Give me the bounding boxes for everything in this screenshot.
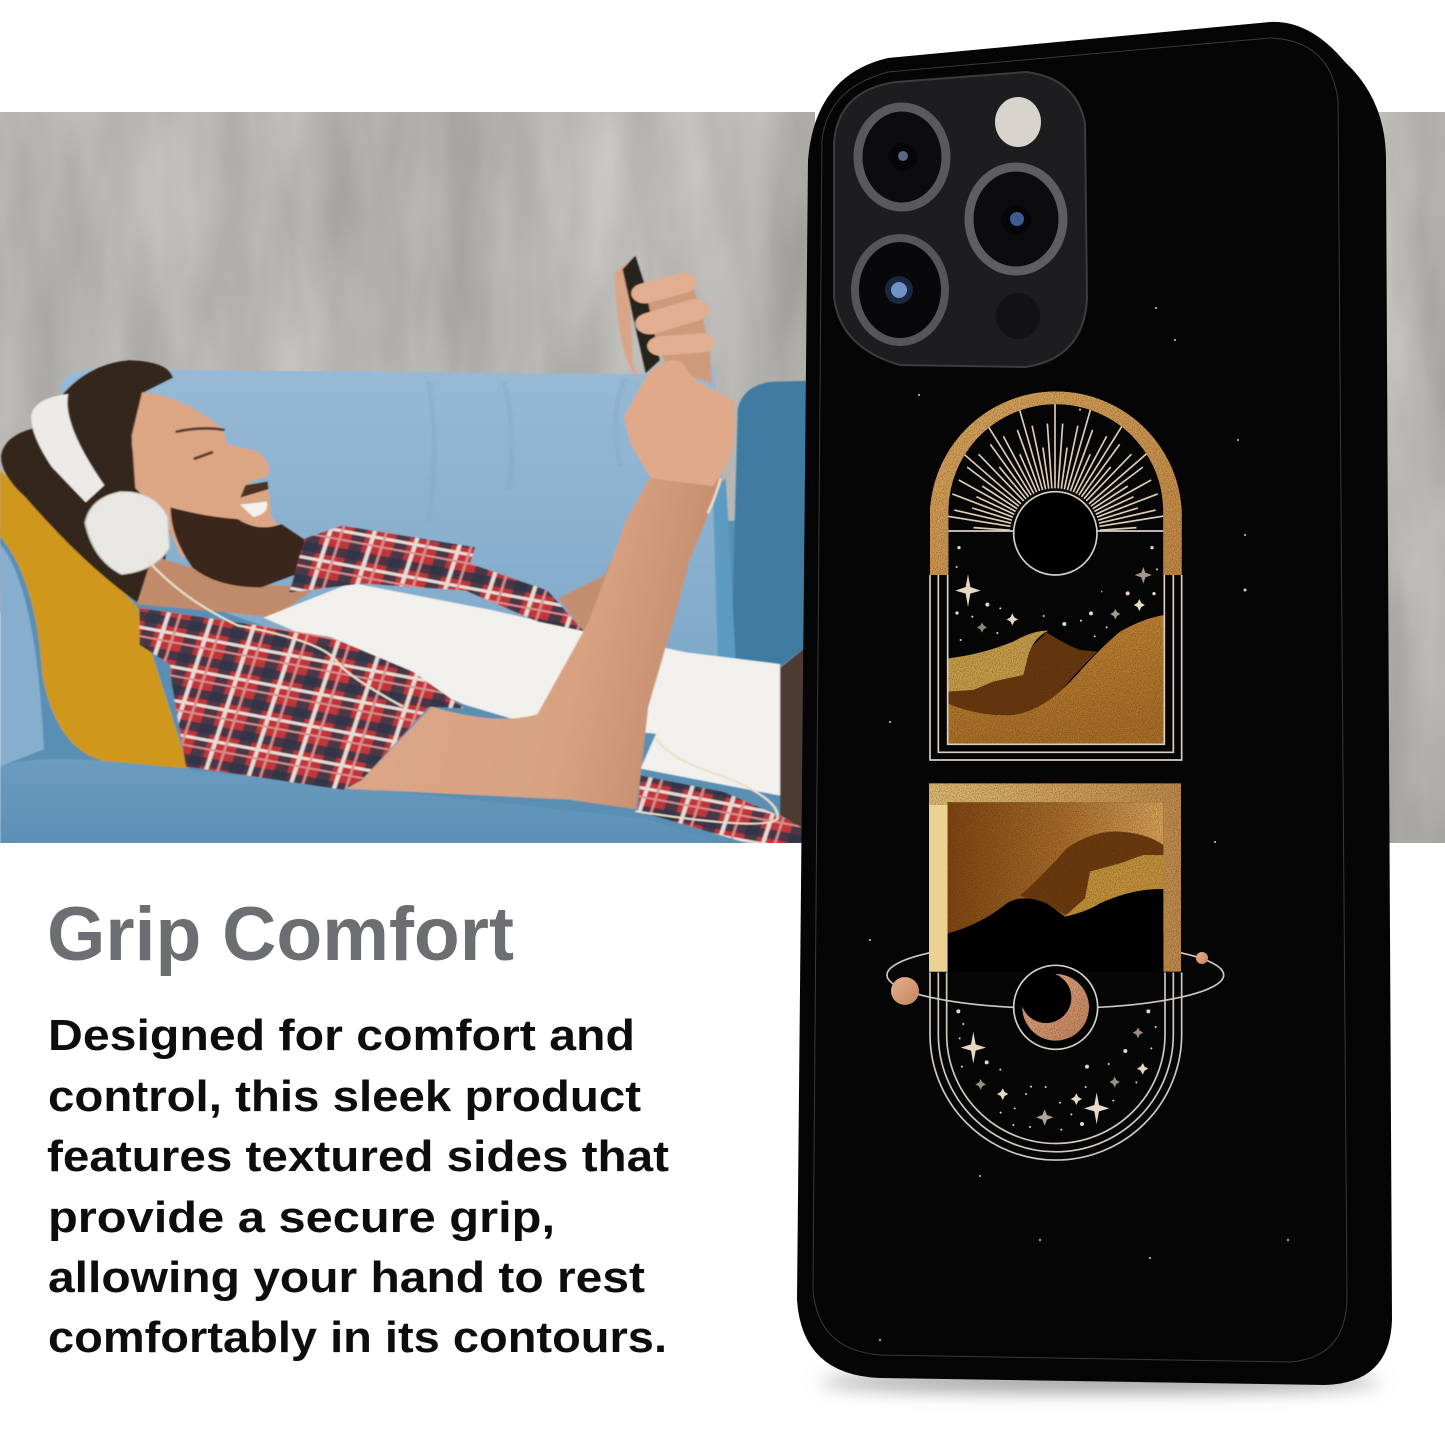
body text: provide a secure grip,	[48, 1193, 555, 1242]
palm behind phone	[615, 262, 641, 380]
sun and frame lines	[930, 492, 1182, 760]
camera module	[834, 72, 1087, 367]
star specks	[869, 307, 1289, 1341]
brow and eye	[176, 428, 225, 459]
hair	[1, 360, 173, 602]
orbit ring	[886, 952, 1224, 1008]
fist	[624, 360, 735, 486]
gold arch base	[930, 391, 1182, 575]
fingers over phone	[645, 283, 702, 346]
gold arch texture	[930, 391, 1182, 575]
forearm	[346, 476, 723, 809]
sun rays	[948, 404, 1164, 530]
moon window artwork	[887, 783, 1224, 1160]
sofa seat	[0, 759, 482, 802]
jeans	[779, 648, 804, 828]
earphone cable	[147, 478, 778, 824]
sun window artwork	[915, 391, 1195, 760]
dune shadow	[948, 632, 1097, 715]
gold sky	[948, 802, 1163, 936]
sensor	[996, 293, 1040, 339]
stars	[955, 409, 1158, 641]
heading: Grip Comfort	[47, 892, 514, 977]
smile	[240, 502, 267, 517]
camera bump	[834, 72, 1087, 367]
lens right	[969, 167, 1063, 271]
shirt collar plaid	[289, 526, 584, 631]
back of hand behind fingers	[641, 272, 712, 384]
case inner edge	[813, 38, 1347, 1362]
body text: comfortably in its contours.	[48, 1313, 667, 1362]
phone in hand	[623, 256, 660, 373]
neck	[137, 556, 318, 618]
lens bottom left	[855, 238, 945, 342]
body text: Designed for comfort and	[48, 1011, 635, 1060]
sofa back cushion	[52, 366, 736, 670]
phone case	[797, 22, 1392, 1385]
sofa cushion folds	[428, 378, 626, 414]
headphones band	[31, 394, 104, 502]
sofa right arm	[732, 380, 806, 666]
moustache	[240, 481, 269, 498]
body text: control, this sleek product	[48, 1072, 641, 1121]
planet left	[891, 977, 919, 1005]
white t-shirt	[263, 583, 780, 796]
case body	[797, 22, 1392, 1385]
stars	[956, 1009, 1157, 1131]
wall backdrop	[0, 112, 815, 612]
shirt body plaid	[139, 608, 465, 790]
flash	[995, 97, 1041, 147]
body text	[47, 1011, 669, 1362]
black hill	[948, 889, 1163, 972]
photo: man on sofa	[0, 112, 1445, 854]
wall strip right of the phone	[1378, 112, 1445, 843]
sofa underlay	[0, 521, 814, 854]
beard	[170, 507, 306, 587]
crescent moon	[1022, 974, 1089, 1041]
pale gold left bar	[929, 805, 948, 972]
yellow pillow	[0, 471, 189, 769]
upper light dune	[1064, 855, 1163, 917]
sofa left arm	[0, 544, 44, 767]
headphones ear cup	[85, 492, 169, 574]
body text: allowing your hand to rest	[48, 1253, 645, 1302]
light dune	[948, 631, 1048, 692]
moon circle	[1014, 965, 1098, 1049]
body text: features textured sides that	[47, 1132, 669, 1181]
lens top left	[858, 107, 946, 207]
upper dune shadow	[1020, 832, 1163, 916]
shirt hem plaid	[637, 775, 802, 843]
man and sofa scene	[0, 256, 814, 854]
U frame lines	[930, 972, 1182, 1160]
phone shadow	[820, 1372, 1380, 1392]
face	[130, 392, 279, 558]
planet right	[1196, 952, 1208, 964]
gold frame	[929, 783, 1181, 972]
arm behind shirt	[558, 559, 612, 631]
big dune	[948, 615, 1164, 744]
